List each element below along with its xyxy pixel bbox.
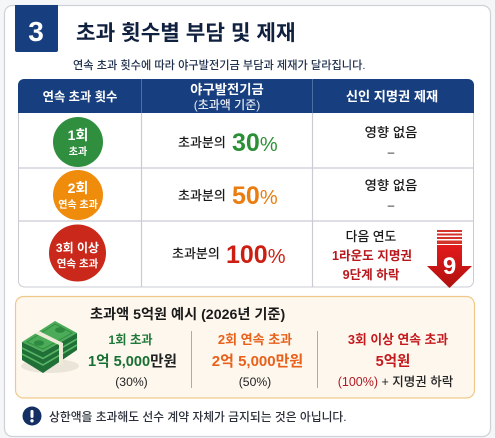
- fund: 100%: [172, 241, 286, 269]
- sanction: draft drop: 9단계 하락: [343, 267, 400, 282]
- badge: 2회 연속 초과: 2회: [68, 180, 88, 196]
- fund: 50%: 50%: [232, 182, 278, 210]
- example: 1 time: [88, 332, 177, 389]
- sanction: none: 영향 없음: [365, 178, 417, 193]
- badge: 1회 초과: 초과: [69, 145, 87, 158]
- section number badge: [15, 5, 58, 52]
- icon: red down arrow with 9: [427, 230, 472, 288]
- fund: 100%: 100%: [226, 241, 286, 269]
- table header: 연속 초과 횟수: [43, 89, 117, 104]
- row 1: one time: [53, 117, 417, 167]
- fund: 50%: 초과분의: [178, 188, 226, 203]
- sanction: draft drop: 다음 연도: [346, 229, 397, 244]
- badge: 1회 초과: 1회: [68, 127, 88, 143]
- icon: exclamation: [22, 406, 42, 426]
- example: 2 consecutive: 2회 연속 초과: [218, 332, 292, 347]
- example: 3 or more consecutive: 5억원: [376, 353, 410, 370]
- sanction: none: [365, 178, 417, 212]
- badge: 3회 이상 연속 초과: 3회 이상: [56, 241, 99, 255]
- subtitle: 연속 초과 횟수에 따라 야구발전기금 부담과 제재가 달라집니다.: [73, 58, 365, 72]
- icon: stack of money: [21, 321, 79, 373]
- badge: 2회 연속 초과: [53, 170, 103, 220]
- fund: 30%: [178, 129, 278, 157]
- sanction: draft drop: [332, 229, 412, 282]
- example: 2 consecutive: (50%): [239, 375, 271, 389]
- divider: [192, 331, 318, 388]
- example: 2 consecutive: [212, 332, 303, 389]
- badge: 3회 이상 연속 초과: [49, 224, 106, 282]
- row 3: three or more: [49, 224, 472, 288]
- table: penalties by excess count: [18, 79, 474, 288]
- badge: 2회 연속 초과: 연속 초과: [58, 198, 98, 211]
- example heading: 초과액 5억원 예시 (2026년 기준): [90, 307, 285, 323]
- title: 초과 횟수별 부담 및 제재: [76, 21, 296, 45]
- sanction: none: –: [388, 198, 395, 212]
- badge: 3회 이상 연속 초과: 연속 초과: [57, 257, 99, 270]
- badge: 1회 초과: [53, 117, 103, 167]
- example: 3 or more consecutive: 3회 이상 연속 초과: [348, 332, 448, 347]
- table header: [18, 79, 474, 113]
- sanction: draft drop: 1라운도 지명권: [332, 249, 412, 263]
- fund: 100%: 초과분의: [172, 246, 220, 261]
- table header: (초과액 기준): [194, 98, 260, 112]
- fund: 50%: [178, 182, 278, 210]
- example: 1 time: 1회 초과: [108, 332, 153, 347]
- example: 2 consecutive: 2억 5,000만원: [212, 353, 303, 370]
- sanction: none: 영향 없음: [365, 125, 417, 140]
- fund: 30%: 초과분의: [178, 135, 226, 150]
- section number badge: 3: [28, 16, 44, 47]
- notice: [22, 406, 347, 426]
- example: 1 time: 1억 5,000만원: [88, 353, 177, 370]
- example: 3 or more consecutive: [338, 332, 454, 389]
- sanction: none: –: [388, 145, 395, 159]
- panel: example for 500 million won: [16, 296, 474, 398]
- table header: 신인 지명권 제재: [346, 89, 438, 104]
- sanction: none: [365, 125, 417, 159]
- row 2: two consecutive: [53, 170, 417, 220]
- example: 3 or more consecutive: (100%) + 지명권 하락: [338, 375, 454, 389]
- icon: red down arrow with 9: 9: [443, 253, 456, 280]
- table header: 야구발전기금: [190, 82, 264, 97]
- example: 1 time: (30%): [115, 375, 148, 389]
- fund: 30%: 30%: [232, 129, 278, 157]
- notice: 상한액을 초과해도 선수 계약 자체가 금지되는 것은 아닙니다.: [49, 410, 347, 424]
